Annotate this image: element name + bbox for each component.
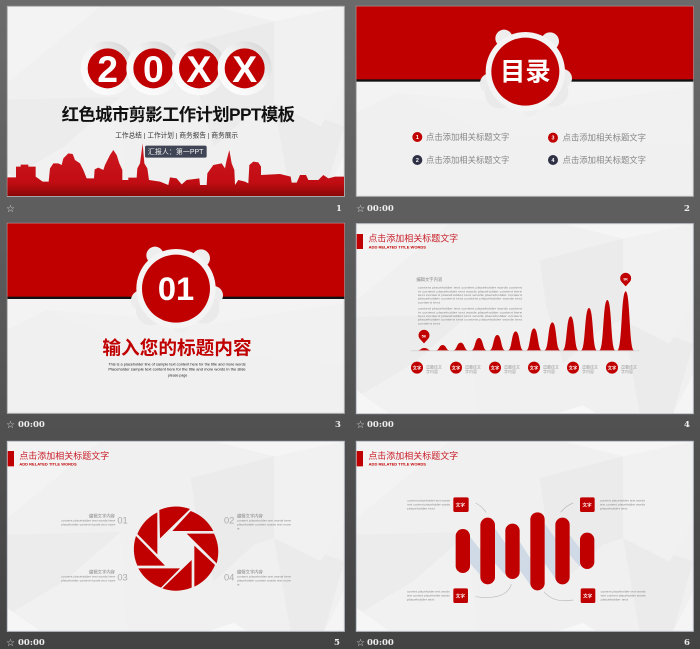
- legend row: 字内容: [426, 368, 438, 374]
- callout top right: 文字: [582, 502, 592, 509]
- callout bottom left: placeholder text: [407, 598, 435, 602]
- callout top right: [580, 497, 646, 512]
- bell chart: [411, 291, 639, 351]
- year badges 20XX: X: [232, 48, 257, 90]
- item 01: [61, 512, 128, 526]
- section description: please page: [168, 374, 187, 378]
- panel: slide 3 section: [7, 223, 344, 413]
- section description: Placeholder sample text content here for the title and more words in the slide: [108, 368, 246, 372]
- callout bottom right: content placeholder text words: [601, 590, 646, 594]
- legend row: 字内容: [465, 368, 477, 374]
- item 04: [224, 569, 291, 587]
- legend row: [411, 362, 637, 374]
- contents item 1: 点击添加相关标题文字: [426, 132, 509, 142]
- item 02: 编辑文字内容: [237, 512, 264, 519]
- header subtitle: ADD RELATED TITLE WORDS: [369, 463, 427, 467]
- chart description: text content placeholder text words placeholder content: [418, 314, 522, 318]
- item 04: content placeholder text words here: [237, 575, 291, 579]
- contents item 2: 点击添加相关标题文字: [426, 155, 509, 165]
- year badges 20XX: X: [187, 48, 212, 90]
- item 04: te: [237, 583, 240, 587]
- callout top right: content placeholder text words: [600, 498, 646, 502]
- contents item 2: 2: [416, 158, 419, 164]
- peak marker: 9K: [623, 278, 628, 282]
- item 03: 编辑文字内容: [89, 569, 116, 576]
- panel: slide 6 bars: [356, 441, 693, 631]
- legend row: 逗最佳文: [543, 363, 559, 369]
- header title: 点击添加相关标题文字: [368, 450, 458, 461]
- section badge: [131, 247, 223, 333]
- legend row: 文字: [608, 364, 617, 371]
- item 02: te: [237, 526, 240, 530]
- callout bottom left: 文字: [456, 593, 465, 600]
- contents badge: [480, 30, 572, 116]
- red banner: [356, 6, 693, 80]
- panel: slide 2 contents: [356, 6, 693, 196]
- callout bottom left: text content placeholder words: [407, 594, 450, 598]
- header title: 点击添加相关标题文字: [19, 450, 109, 461]
- legend row: 字内容: [621, 368, 633, 374]
- slide 1 number: 1: [336, 204, 342, 214]
- chart description: text content placeholder text words placeholder content: [418, 293, 522, 297]
- chart description: content placeholder text content placeholder words content: [418, 286, 522, 290]
- slide 4 time: 00:00: [367, 420, 394, 430]
- header accent: [357, 451, 363, 466]
- presenter label: [145, 146, 207, 158]
- presenter label: 汇报人：第一PPT: [148, 147, 204, 156]
- legend row: 逗最佳文: [504, 363, 520, 369]
- panel: slide 4 bell chart: [356, 224, 693, 414]
- slide 2 number: 2: [684, 204, 690, 214]
- start marker: [418, 330, 429, 343]
- red city skyline: [7, 143, 344, 196]
- slide 3 time: ☆: [6, 420, 15, 431]
- slide 3 time: 00:00: [18, 420, 45, 430]
- chart description: placeholder content text content placeholder words text: [418, 318, 522, 322]
- panel: slide 5 aperture: [7, 441, 344, 631]
- callout bottom right: [581, 588, 646, 603]
- item 02: [224, 512, 291, 530]
- slide 3 number: 3: [335, 420, 341, 430]
- legend row: 文字: [491, 364, 500, 371]
- callout top left: text content placeholder words: [407, 502, 451, 506]
- curved connectors: [475, 503, 573, 601]
- header accent: [357, 234, 363, 249]
- year badges 20XX: [81, 41, 272, 95]
- legend row: 逗最佳文: [465, 363, 481, 369]
- callout bottom left: content placeholder text words: [407, 590, 450, 594]
- contents badge: 目录: [500, 59, 551, 87]
- item 03: [61, 569, 128, 583]
- legend row: 逗最佳文: [426, 363, 442, 369]
- bar shadows: [470, 523, 580, 585]
- contents item 3: 点击添加相关标题文字: [563, 132, 646, 142]
- slide 6 time: ☆: [356, 638, 365, 649]
- callout top left: placeholder text: [407, 506, 435, 510]
- legend row: 字内容: [543, 368, 555, 374]
- chart description: 编辑文字内容: [416, 276, 443, 283]
- item 01: 01: [117, 515, 128, 525]
- slide 6 time: 00:00: [367, 638, 394, 648]
- callout top right: text content placeholder words: [600, 502, 646, 506]
- item 02: content placeholder text words here: [237, 518, 291, 522]
- header subtitle: ADD RELATED TITLE WORDS: [369, 245, 427, 249]
- red rounded bars: [456, 512, 594, 590]
- section description: [108, 363, 246, 378]
- contents item 1: 1: [416, 135, 419, 141]
- header title: 点击添加相关标题文字: [368, 233, 458, 244]
- slide 2 time: ☆: [356, 204, 365, 215]
- black rule: [7, 297, 344, 299]
- section badge: 01: [158, 270, 194, 307]
- callout top left: 文字: [456, 502, 465, 509]
- cover subtitle: 工作总结 | 工作计划 | 商务报告 | 商务展示: [115, 130, 238, 139]
- legend row: 文字: [530, 364, 539, 371]
- header accent: [8, 451, 14, 466]
- slide 5 number: 5: [334, 638, 340, 648]
- year badges 20XX: 2: [97, 48, 118, 90]
- contents item 4: 4: [552, 158, 555, 164]
- legend row: 逗最佳文: [621, 363, 637, 369]
- legend row: 文字: [569, 364, 578, 371]
- contents item 3: 3: [552, 136, 555, 142]
- start marker: 5K: [422, 335, 427, 339]
- chart description: placeholder content text content placeholder words text: [418, 297, 522, 301]
- slide 4 time: [356, 420, 394, 431]
- aperture diagram: [134, 507, 218, 591]
- contents item 4: 点击添加相关标题文字: [563, 155, 646, 165]
- item 01: placeholder content words text more: [61, 522, 116, 526]
- item 03: 03: [117, 572, 128, 582]
- peak marker: [620, 273, 631, 286]
- legend row: 文字: [413, 364, 422, 371]
- callout top left: [407, 497, 469, 512]
- slide 5 time: 00:00: [18, 638, 45, 648]
- red banner: [7, 223, 344, 297]
- section description: This is a placeholder line of sample text content here for the title and more words: [108, 363, 246, 367]
- year badges 20XX: 0: [143, 48, 164, 90]
- panel: slide 1 cover: [7, 6, 344, 196]
- callout bottom right: 文字: [583, 593, 593, 600]
- legend row: 字内容: [582, 368, 594, 374]
- black rule: [356, 79, 693, 82]
- legend row: 逗最佳文: [582, 363, 598, 369]
- header subtitle: ADD RELATED TITLE WORDS: [19, 463, 78, 467]
- slide 5 time: [6, 638, 45, 649]
- legend row: 字内容: [504, 368, 516, 374]
- slide 4 number: 4: [684, 420, 690, 430]
- slide 2 time: 00:00: [367, 204, 394, 214]
- slide 6 time: [356, 638, 394, 649]
- chart description: content text: [418, 322, 440, 326]
- section title: 输入您的标题内容: [102, 338, 252, 359]
- item 02: placeholder content words text more: [237, 522, 291, 526]
- item 03: placeholder content words text more: [61, 579, 116, 583]
- slide 2 time: [356, 204, 394, 215]
- item 02: 02: [224, 515, 234, 525]
- chart description: [416, 276, 522, 326]
- callout top right: placeholder text: [600, 506, 628, 510]
- chart description: content placeholder text content placeholder words content: [418, 307, 522, 311]
- callout bottom right: text content placeholder words: [601, 594, 646, 598]
- item 03: content placeholder text words here: [61, 575, 116, 579]
- chart description: in content placeholder text words placeholder content here: [418, 310, 522, 314]
- slide 6 number: 6: [684, 638, 690, 648]
- item 04: 编辑文字内容: [237, 569, 264, 576]
- slide 4 time: ☆: [356, 420, 365, 431]
- legend row: 文字: [452, 364, 461, 371]
- item 04: placeholder content words text more: [237, 579, 291, 583]
- callout top left: content placeholder text words: [407, 498, 451, 502]
- chart description: in content placeholder text words placeholder content here: [418, 289, 522, 293]
- item 01: content placeholder text words here: [61, 518, 116, 522]
- chart description: content text: [418, 301, 440, 305]
- item 04: 04: [224, 572, 234, 582]
- item 01: 编辑文字内容: [89, 512, 116, 519]
- callout bottom left: [407, 588, 468, 603]
- cover title: 红色城市剪影工作计划PPT模板: [62, 105, 295, 125]
- slide 1 star icon: ☆: [6, 204, 15, 215]
- slide 3 time: [6, 420, 45, 431]
- callout bottom right: placeholder text: [601, 598, 628, 602]
- slide 5 time: ☆: [6, 638, 15, 649]
